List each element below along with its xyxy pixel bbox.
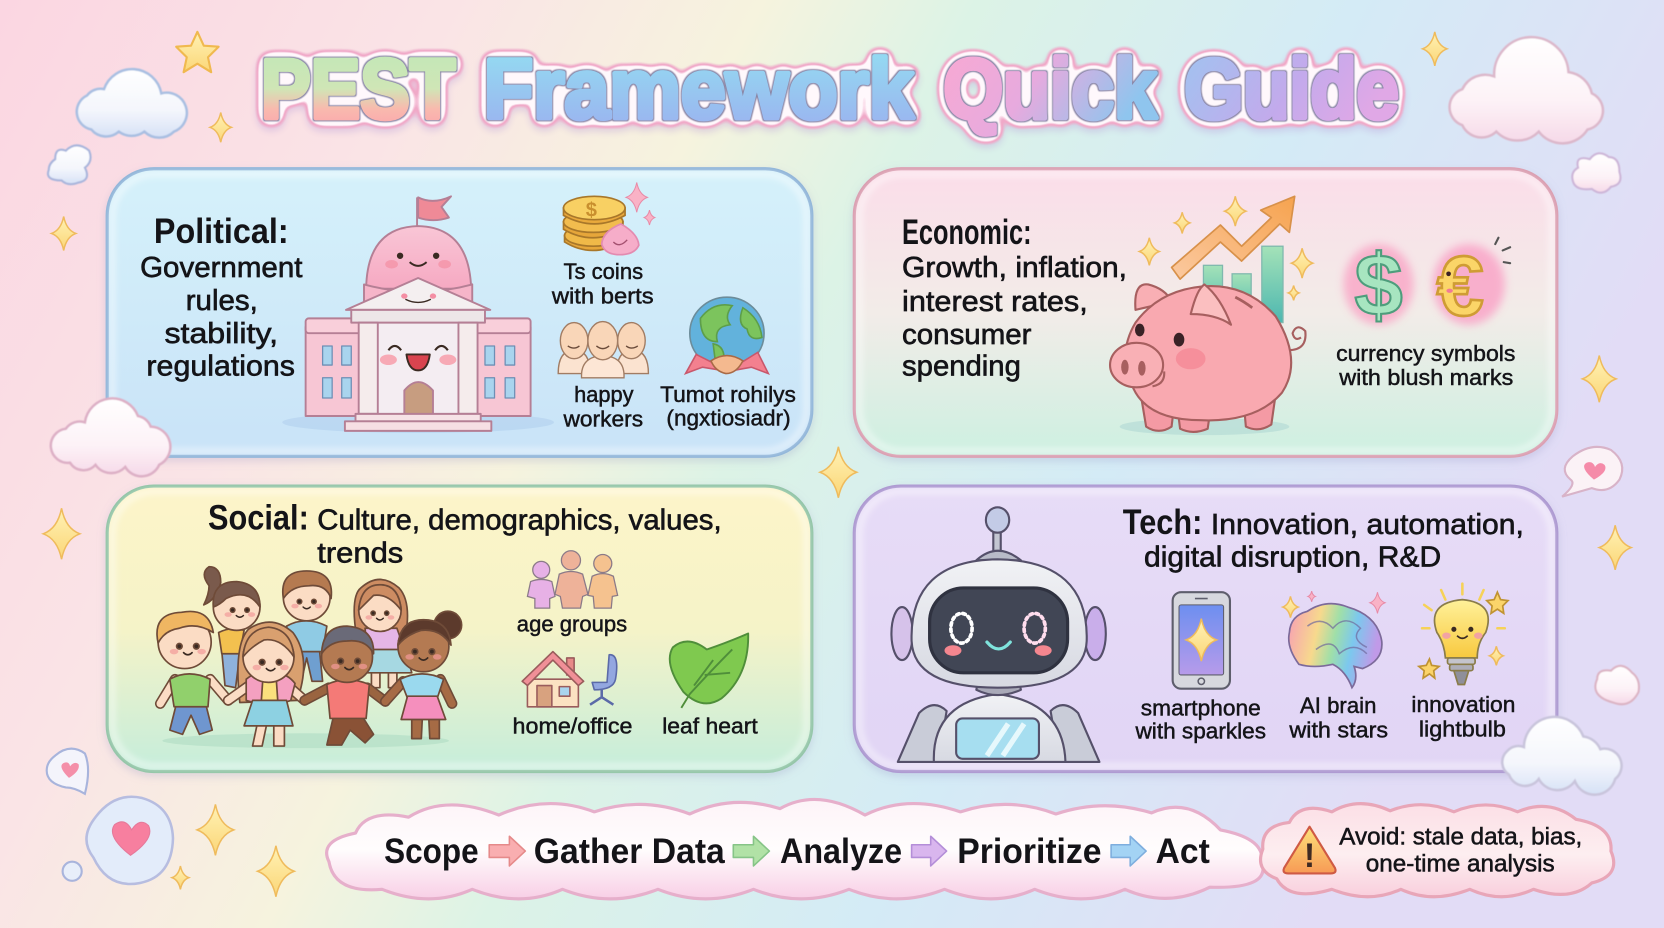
gold star top left [176, 32, 219, 72]
caption: currency symbols: currency symbols [1336, 341, 1515, 366]
panel: economic [854, 169, 1557, 456]
avoid text [1339, 824, 1582, 877]
step: Prioritize: Prioritize [957, 832, 1102, 871]
avoid text: one-time analysis [1366, 850, 1555, 877]
tech description: Innovation, automation, [1211, 509, 1524, 541]
avoid callout cloud [1261, 804, 1614, 897]
icon: happy workers [558, 322, 648, 378]
icon: pink sparkle small [644, 210, 655, 225]
cloud: top right [1450, 37, 1603, 143]
caption: trade policy [660, 382, 796, 431]
icon: pink sparkle large [626, 183, 647, 212]
political description: regulations [146, 351, 295, 383]
caption: lightbulb [1411, 692, 1515, 741]
caption: smartphone: smartphone [1141, 695, 1261, 720]
caption: leaf heart: leaf heart [662, 713, 759, 738]
caption: coins [551, 259, 654, 309]
child with ponytail [204, 567, 260, 688]
caption: trade policy: (ngxtiosiadr) [666, 406, 791, 431]
panel: political [107, 169, 812, 456]
icon: coins with blob: $ [586, 199, 597, 221]
icon: euro symbol: € [1437, 238, 1484, 333]
icon: house and office chair [522, 652, 617, 707]
icon: piggy bank [1110, 284, 1306, 435]
step: Analyze: Analyze [780, 832, 902, 871]
caption: currency symbols: with blush marks [1338, 365, 1513, 390]
social description [317, 505, 722, 569]
political description: rules, [186, 285, 258, 317]
caption: age groups: age groups [517, 611, 627, 636]
caption: happy workers [562, 382, 643, 432]
process flow cloud [327, 799, 1263, 899]
centre girl [228, 622, 305, 746]
caption: currency symbols [1336, 341, 1515, 390]
arrow: analyze to prioritize [912, 836, 947, 866]
panel: social [107, 486, 812, 772]
social heading: Social: [208, 499, 309, 538]
political description: stability, [164, 318, 278, 350]
icon: coins with blob [564, 196, 639, 255]
cloud: over political panel [51, 398, 170, 476]
dark-skinned boy [305, 626, 385, 745]
caption: AI brain: AI brain [1300, 693, 1376, 718]
economic description [902, 252, 1127, 383]
social description: trends [317, 537, 403, 569]
title: Guide [1184, 41, 1399, 136]
title: Framework [484, 41, 914, 136]
political heading: Political: [154, 212, 289, 251]
icon: warning triangle: ! [1304, 837, 1315, 875]
icon: dollar symbol [1344, 237, 1414, 334]
chart bars [1203, 246, 1283, 323]
caption: coins: with berts [551, 284, 654, 309]
icon: warning triangle [1284, 827, 1336, 875]
caption: lightbulb: innovation [1411, 692, 1515, 717]
economic description: Growth, inflation, [902, 252, 1127, 284]
cloud: small left [48, 145, 91, 184]
sparkles around the arrow [1139, 196, 1313, 300]
heart bubble: right [1562, 447, 1622, 497]
growth arrow [1172, 196, 1295, 279]
social description: Culture, demographics, values, [317, 505, 722, 537]
caption: smartphone [1134, 695, 1266, 744]
heart bubble: left small [47, 749, 88, 794]
step: Gather Data: Gather Data [534, 832, 725, 871]
icon: dollar symbol: $ [1354, 237, 1403, 334]
title [261, 41, 1399, 136]
economic description: consumer [902, 319, 1032, 351]
economic description: interest rates, [902, 286, 1088, 318]
cloud: small lower right [1595, 666, 1639, 704]
icon: globe with handshake [686, 297, 768, 374]
step: Scope: Scope [384, 832, 479, 871]
arrow: gather data to analyze [733, 836, 769, 866]
icon: AI brain [1283, 591, 1385, 688]
caption: trade policy: Tumot rohilys [660, 382, 796, 407]
tech description [1144, 509, 1524, 574]
illustration: robot [891, 507, 1106, 762]
arrow: scope to gather data [489, 836, 525, 866]
cloud: small right [1572, 153, 1620, 193]
step: Act: Act [1156, 832, 1210, 871]
icon: age groups [527, 551, 618, 608]
dark-skinned girl with bun [385, 611, 462, 739]
economic description: spending [902, 351, 1021, 383]
caption: home/office: home/office [513, 713, 632, 738]
caption: happy workers: workers [562, 407, 643, 432]
title: PEST [261, 41, 455, 136]
avoid text: Avoid: stale data, bias, [1339, 824, 1582, 851]
caption: smartphone: with sparkles [1134, 719, 1266, 744]
caption: AI brain: with stars [1288, 718, 1388, 743]
cloud: over tech panel [1502, 717, 1622, 795]
icon: lightbulb [1419, 584, 1508, 684]
political description: Government [140, 252, 302, 284]
tech description: digital disruption, R&D [1144, 542, 1441, 574]
political description [140, 252, 302, 383]
illustration: children holding hands [157, 567, 462, 748]
small bubble [63, 862, 82, 881]
caption: coins: Ts coins [564, 259, 643, 284]
icon: government building [282, 196, 554, 433]
boy with brown hair [283, 571, 331, 681]
icon: leaf heart [670, 634, 748, 708]
girl with long hair [354, 579, 412, 688]
panel: tech [854, 486, 1557, 772]
blond boy [157, 611, 228, 734]
icon: smartphone with sparkles [1173, 592, 1230, 689]
caption: AI brain [1288, 693, 1388, 743]
economic heading: Economic: [902, 213, 1032, 252]
cloud: top left [77, 69, 187, 138]
caption: lightbulb: lightbulb [1419, 716, 1506, 741]
title: Quick [943, 41, 1157, 136]
caption: happy workers: happy [574, 382, 634, 407]
heart bubble: left large [86, 797, 173, 884]
arrow: prioritize to act [1111, 836, 1146, 866]
tech heading: Tech: [1123, 503, 1202, 542]
icon: euro symbol [1433, 238, 1510, 333]
